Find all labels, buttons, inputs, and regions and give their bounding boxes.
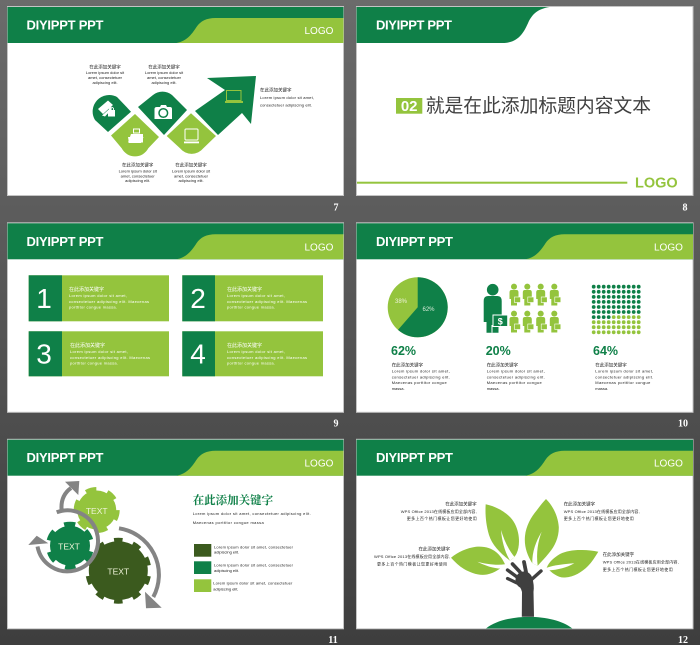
page number 8: 8: [682, 202, 688, 214]
text block 3: [119, 162, 158, 183]
text block 3: Lorem ipsum dolor sit: [119, 168, 158, 173]
description text: [193, 511, 311, 525]
icon: hand trunk: [508, 562, 541, 617]
card 2: porttitor congue massa.: [227, 304, 275, 310]
stat column 3: Maecenas porttitor congue: [595, 380, 651, 385]
card 4: 在此添加关键字: [227, 342, 262, 349]
leaf: right: [547, 550, 598, 578]
text block top left: [401, 500, 477, 521]
text block right: 在此添加关键字: [603, 551, 635, 558]
stat column 1: Maecenas porttitor congue: [392, 380, 447, 385]
description text: Maecenas porttitor congue massa: [193, 520, 264, 525]
header tab: [356, 7, 550, 43]
section heading: 就是在此添加标题内容文本: [426, 91, 651, 118]
card 4: [182, 331, 323, 376]
text block top left: WPS Office 2013在线模板应用全部内容,: [401, 508, 477, 514]
stat column 2: 在此添加关键字: [487, 362, 519, 369]
keyword heading: 在此添加关键字: [193, 492, 274, 508]
leaf: top left: [485, 504, 519, 561]
stat column 1: consectetuer adipiscing elit.: [392, 374, 450, 380]
gear: dark green: TEXT: [58, 541, 80, 551]
description text: Lorem ipsum dolor sit amet, consectetuer adipiscing elit.: [193, 511, 311, 516]
card 1: Lorem ipsum dolor sit amet,: [69, 293, 127, 298]
header band: DIYIPPT PPT: [26, 450, 104, 465]
header band: [356, 223, 693, 259]
text block 2: Lorem ipsum dolor sit: [145, 70, 184, 75]
stat column 3: consectetuer adipiscing elit.: [595, 374, 653, 380]
icon: folder tile: [111, 114, 159, 156]
stat column 3: [593, 344, 653, 391]
card 3: 在此添加关键字: [70, 342, 105, 349]
ground mound: [486, 617, 572, 628]
dot matrix chart: [594, 287, 640, 332]
text block 4: adipiscing elit.: [178, 178, 204, 183]
header tab: DIYIPPT PPT: [376, 18, 452, 32]
header band: DIYIPPT PPT: [376, 234, 453, 249]
stat column 2: massa.: [487, 386, 500, 391]
header band: LOGO: [654, 459, 683, 470]
stat column 1: massa.: [392, 386, 405, 391]
text block left: 更多上百个热门模板让您更好地使用: [377, 560, 447, 566]
card 3: [29, 331, 169, 376]
header band: DIYIPPT PPT: [376, 450, 453, 465]
footer line and logo: LOGO: [635, 176, 678, 192]
card 1: porttitor congue massa.: [69, 304, 117, 310]
legend: Lorem ipsum dolor sit amet, consectetuer: [214, 562, 294, 567]
text block right: WPS Office 2013在线模板应用全部内容,: [603, 558, 679, 564]
header band: LOGO: [304, 459, 334, 470]
card 4: consectetuer adipiscing elit. Maecenas: [227, 355, 307, 360]
header band: [8, 223, 344, 259]
stat column 3: 在此添加关键字: [595, 362, 627, 369]
stat column 1: Lorem ipsum dolor sit amet,: [392, 368, 450, 374]
text block 4: Lorem ipsum dolor sit: [172, 168, 211, 173]
panel: slide 7 process arrow: [8, 6, 344, 196]
pie chart: 62%: [422, 307, 435, 313]
card 4: Lorem ipsum dolor sit amet,: [227, 349, 285, 354]
gear: light green: [69, 482, 125, 538]
text block top right: WPS Office 2013在线模板应用全部内容,: [564, 508, 640, 514]
header band: LOGO: [654, 242, 683, 253]
header band: [356, 440, 693, 476]
gear: olive: TEXT: [107, 566, 129, 576]
gear: light green: TEXT: [86, 506, 108, 516]
text block right: 更多上百个热门模板让您更好地使用: [603, 566, 673, 572]
leaf: left: [451, 547, 505, 575]
card 2: Lorem ipsum dolor sit amet,: [227, 293, 285, 298]
legend: [194, 544, 294, 592]
text block 3: 在此添加关键字: [122, 162, 154, 169]
section number badge: [396, 98, 422, 115]
card 2: consectetuer adipiscing elit. Maecenas: [227, 299, 307, 304]
arrow: ring around dark gear: [28, 510, 98, 571]
arrow with laptop: [195, 76, 256, 135]
text block 2: adipiscing elit.: [151, 80, 177, 85]
text block 1: Lorem ipsum dolor sit: [86, 70, 125, 75]
card 1: [29, 275, 169, 321]
text block 1: [86, 63, 125, 85]
panel: slide 8 section title: [356, 6, 693, 196]
text block top left: 在此添加关键字: [445, 500, 477, 507]
card 1: 1: [36, 283, 52, 314]
text block right of arrow: [260, 87, 314, 108]
panel: slide 12 tree: [356, 439, 693, 629]
header band: [8, 440, 344, 476]
text block 1: adipiscing elit.: [92, 80, 118, 85]
card 3: consectetuer adipiscing elit. Maecenas: [70, 355, 150, 360]
text block left: [374, 546, 450, 566]
leaf: top centre: [525, 499, 559, 566]
stat column 2: Lorem ipsum dolor sit amet,: [487, 368, 545, 374]
panel: slide 11 gears: [8, 439, 344, 629]
card 3: 3: [36, 338, 52, 370]
stat column 3: Lorem ipsum dolor sit amet,: [595, 368, 653, 374]
text block right of arrow: Lorem ipsum dolor sit amet,: [260, 95, 314, 100]
card 3: porttitor congue massa.: [70, 360, 118, 366]
text block top right: 在此添加关键字: [564, 500, 596, 507]
text block 2: 在此添加关键字: [148, 63, 180, 70]
gear: dark green: [44, 520, 96, 572]
legend: Lorem ipsum dolor sit amet, consectetuer: [214, 544, 294, 549]
header band: LOGO: [304, 242, 334, 253]
stat column 2: [486, 344, 545, 391]
stat column 1: [391, 344, 450, 391]
legend: adipiscing elit.: [214, 568, 239, 573]
text block 4: amet, consectetuer: [174, 173, 209, 178]
icon: credit card lock tile: [93, 95, 131, 132]
text block top right: [564, 500, 640, 521]
text block right: [603, 551, 679, 572]
text block 1: amet, consectetuer: [88, 75, 123, 80]
legend: Lorem ipsum dolor sit amet, consectetuer: [213, 581, 293, 586]
card 2: 2: [190, 283, 206, 314]
page number 9: 9: [334, 418, 338, 430]
section number badge: 02: [401, 98, 418, 115]
card 2: [182, 275, 323, 321]
icon: people pictogram: $: [498, 316, 503, 326]
panel: slide 9 numbered cards: [8, 223, 344, 412]
text block right of arrow: 在此添加关键字: [260, 87, 292, 94]
gear: olive: [84, 536, 153, 605]
text block top right: 更多上百个热门模板让您更好地使用: [564, 515, 634, 521]
icon: laptop tile: [167, 113, 216, 154]
text block 3: amet, consectetuer: [121, 173, 155, 178]
icon: people pictogram: [484, 284, 561, 333]
stat column 3: massa.: [595, 386, 608, 391]
stat column 1: 在此添加关键字: [392, 362, 424, 369]
legend: adipiscing elit.: [214, 550, 239, 555]
card 3: Lorem ipsum dolor sit amet,: [70, 349, 128, 354]
text block 4: [172, 162, 211, 183]
card 2: 在此添加关键字: [227, 286, 262, 293]
text block 3: adipiscing elit.: [125, 178, 150, 183]
header band: DIYIPPT PPT: [26, 234, 104, 249]
stat column 2: consectetuer adipiscing elit.: [487, 374, 545, 380]
stat column 3: 64%: [593, 344, 618, 358]
card 4: 4: [190, 338, 206, 370]
pie chart: [388, 277, 448, 337]
arrow: around olive gear: [119, 528, 162, 608]
page number 7: 7: [334, 202, 338, 214]
stat column 2: Maecenas porttitor congue: [487, 380, 542, 385]
stat column 2: 20%: [486, 344, 511, 358]
text block top left: 更多上百个热门模板让您更好地使用: [407, 515, 477, 521]
text block left: WPS Office 2013在线模板应用全部内容,: [374, 553, 450, 559]
text block right of arrow: consectetuer adipiscing elit.: [260, 102, 312, 108]
legend: adipiscing elit.: [213, 586, 238, 591]
panel: slide 10 statistics: [356, 223, 693, 412]
pie chart: 38%: [395, 299, 408, 305]
header band: DIYIPPT PPT: [26, 18, 104, 32]
text block 2: [145, 63, 184, 85]
text block left: 在此添加关键字: [418, 546, 450, 553]
stat column 1: 62%: [391, 344, 416, 358]
page number 10: 10: [678, 418, 688, 430]
text block 1: 在此添加关键字: [89, 63, 121, 70]
header band: [8, 7, 344, 43]
icon: camera tile: [138, 92, 187, 135]
header band: LOGO: [304, 26, 334, 37]
text block 4: 在此添加关键字: [175, 162, 207, 169]
arrow: up to top: [61, 481, 79, 511]
card 1: consectetuer adipiscing elit. Maecenas: [69, 299, 149, 304]
text block 2: amet, consectetuer: [147, 75, 182, 80]
card 1: 在此添加关键字: [69, 286, 104, 293]
card 4: porttitor congue massa.: [227, 360, 275, 366]
